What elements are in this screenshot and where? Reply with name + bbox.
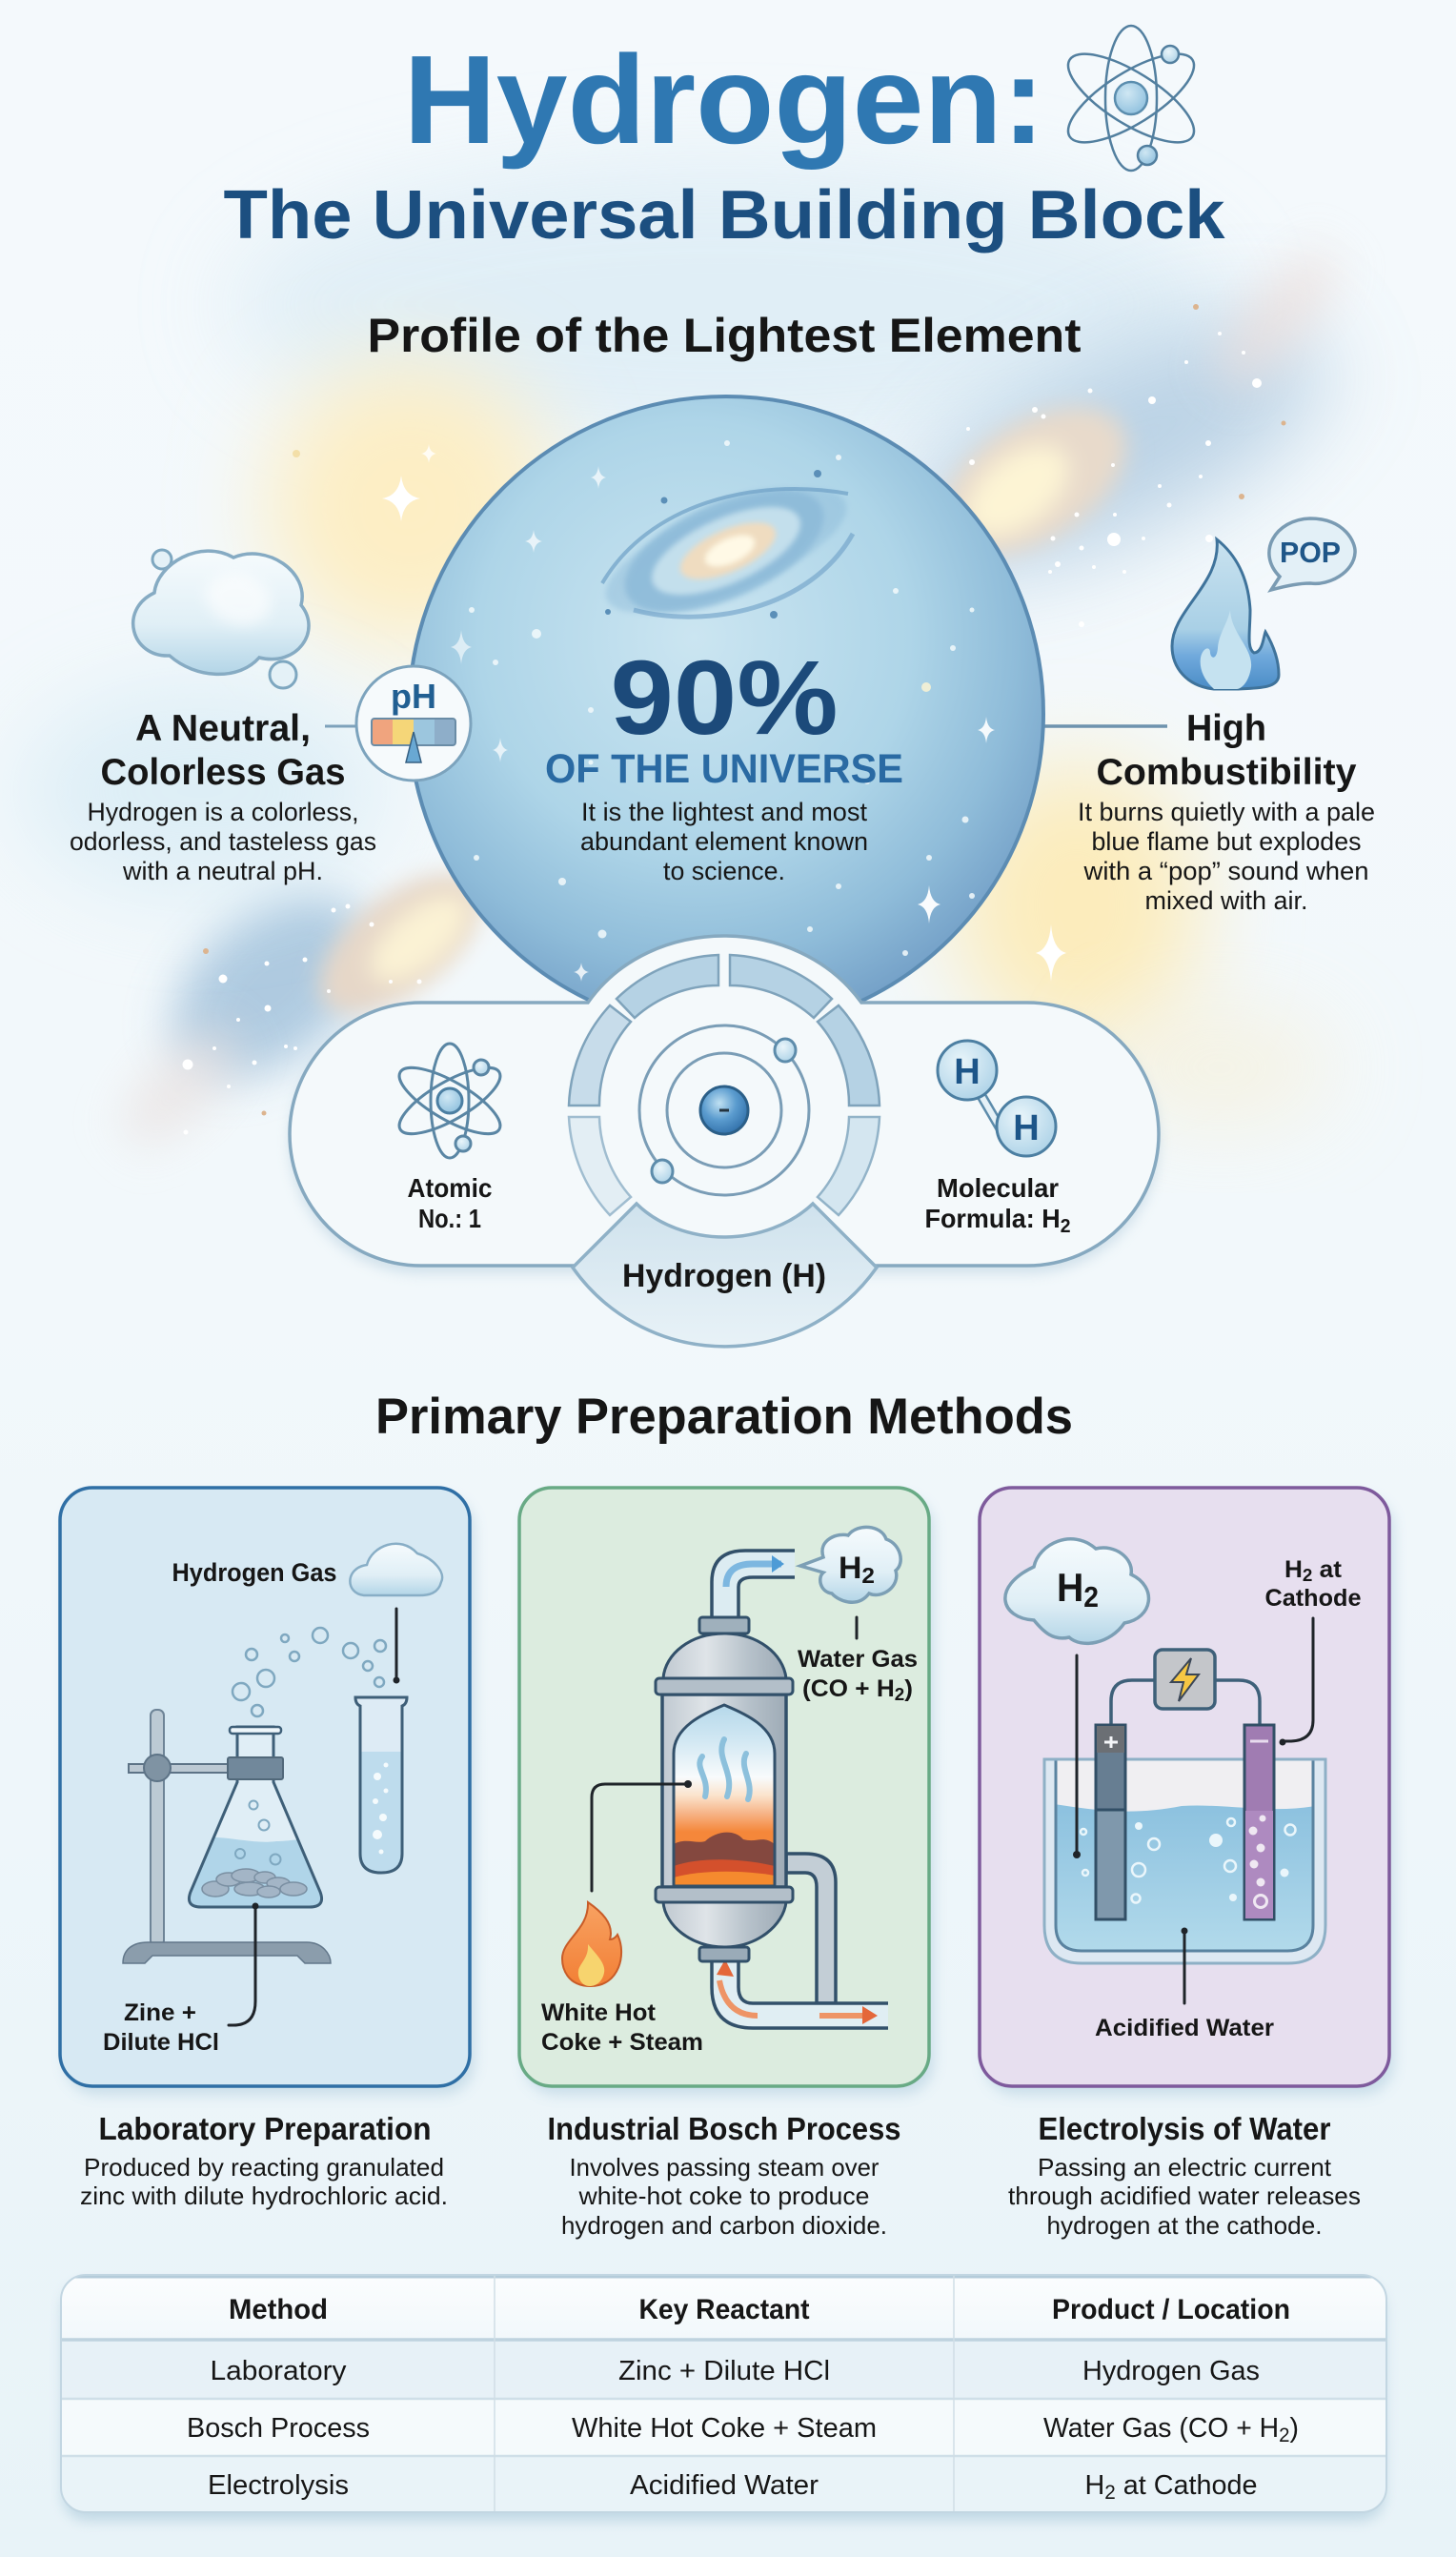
icon: pH scale <box>356 666 471 781</box>
title <box>223 30 1226 254</box>
label: H2 at cathode: 2 <box>1303 1566 1312 1585</box>
pointer line <box>229 1902 259 2025</box>
text: neutral colorless gas: with a neutral pH. <box>122 857 323 885</box>
short connector <box>856 1617 858 1638</box>
caption: industrial bosch process: hydrogen and carbon dioxide. <box>561 2211 887 2240</box>
circuit wires <box>1111 1680 1260 1725</box>
row: electrolysis: H <box>1084 2470 1104 2501</box>
heading: profile: Profile of the Lightest Element <box>368 309 1082 362</box>
text: neutral colorless gas: A Neutral, <box>135 708 311 749</box>
label: white hot coke: Coke + Steam <box>541 2029 703 2056</box>
sphere description <box>580 798 868 885</box>
label: H2 at cathode: Cathode <box>1265 1585 1362 1612</box>
table header: Key Reactant <box>638 2294 810 2325</box>
text: high combustibility: High <box>1186 708 1266 749</box>
beaker <box>1044 1759 1325 1963</box>
text: neutral colorless gas <box>70 708 376 885</box>
outlet cloud <box>800 1527 900 1602</box>
icon: orange flame <box>562 1902 621 1986</box>
text: high combustibility: with a “pop” sound when <box>1082 857 1368 885</box>
caption: laboratory preparation: zinc with dilute hydrochloric acid. <box>80 2182 448 2210</box>
pointer line <box>592 1780 692 1891</box>
text: high combustibility: mixed with air. <box>1145 886 1307 915</box>
text: atomic number: No.: 1 <box>418 1204 481 1233</box>
comparison table <box>61 2275 1386 2521</box>
panel: atom profile pill <box>290 936 1159 1347</box>
text: high combustibility <box>1078 708 1375 915</box>
top outlet pipe <box>712 1551 795 1617</box>
label: white hot coke <box>541 1999 703 2056</box>
row: electrolysis: 2 <box>1104 2482 1116 2504</box>
icon: POP speech bubble: POP <box>1280 536 1341 569</box>
row: bosch process: Water Gas (CO + H <box>1043 2413 1284 2444</box>
row: electrolysis: at Cathode <box>1116 2470 1258 2501</box>
hydrogen atom diagram <box>639 1025 809 1195</box>
panel: laboratory preparation <box>60 1488 475 2095</box>
caption: industrial bosch process <box>547 2111 901 2240</box>
label: zinc and acid: Zine + <box>124 1999 196 2026</box>
panel: right connector line <box>1039 724 1167 728</box>
text: neutral colorless gas: odorless, and tasteless gas <box>70 827 376 856</box>
icon: POP speech bubble <box>1269 518 1355 590</box>
stat label: OF THE UNIVERSE <box>545 746 903 792</box>
caption: industrial bosch process: Industrial Bosch Process <box>547 2111 901 2146</box>
caption: electrolysis of water <box>1008 2111 1361 2240</box>
test tube <box>355 1697 407 1873</box>
icon: H2 molecule: H <box>1013 1108 1040 1148</box>
panel: industrial bosch process <box>519 1488 934 2095</box>
gas cloud <box>1005 1539 1148 1643</box>
icon: cloud <box>133 550 309 688</box>
row: bosch process: ) <box>1290 2413 1299 2444</box>
stat: 90%: 90% <box>610 639 839 757</box>
row: bosch process: 2 <box>1279 2425 1290 2446</box>
label: H2 in cloud: H <box>839 1551 860 1585</box>
label: H2 at cathode: H <box>1284 1556 1302 1583</box>
element name badge: Hydrogen (H) <box>622 1258 826 1294</box>
caption: laboratory preparation: Produced by reacting granulated <box>84 2153 444 2182</box>
label: hydrogen gas: Hydrogen Gas <box>172 1558 337 1587</box>
panel: left connector line <box>325 724 358 728</box>
text: molecular formula: Formula: H <box>924 1204 1065 1233</box>
retort stand <box>123 1710 331 1963</box>
row: laboratory: Hydrogen Gas <box>1082 2356 1260 2386</box>
icon: H2 molecule: H <box>954 1052 981 1092</box>
pointer: acidified water <box>1182 1927 1187 2003</box>
row: electrolysis: Acidified Water <box>630 2470 819 2501</box>
table header: Method <box>229 2294 328 2325</box>
caption: laboratory preparation <box>80 2111 448 2210</box>
label: H2 at cathode: at <box>1312 1556 1343 1583</box>
row: laboratory: Laboratory <box>210 2356 347 2386</box>
icon: gas cloud <box>350 1544 442 1595</box>
sphere: 90% of the universe <box>409 396 1043 1031</box>
row: electrolysis: Electrolysis <box>208 2470 349 2501</box>
label: water gas: ) <box>904 1675 913 1702</box>
text: high combustibility: It burns quietly with a pale <box>1078 798 1375 826</box>
pointer: cloud to water <box>1073 1655 1081 1858</box>
galaxy in sphere <box>591 464 861 638</box>
row: bosch process: Bosch Process <box>187 2413 370 2444</box>
sphere description: to science. <box>663 857 785 885</box>
sphere description: abundant element known <box>580 827 868 856</box>
reactor vessel <box>656 1617 793 1961</box>
label: zinc and acid <box>103 1999 219 2056</box>
bubbles <box>233 1628 386 1716</box>
text: high combustibility: blue flame but explodes <box>1092 827 1361 856</box>
icon: title atom <box>1056 26 1206 171</box>
icon: atom <box>391 1044 509 1158</box>
label: H2: 2 <box>1083 1582 1099 1613</box>
side pipe <box>786 1854 836 2003</box>
row: laboratory <box>210 2356 1260 2386</box>
row: bosch process <box>187 2413 1299 2446</box>
table header <box>229 2294 1290 2325</box>
heading: primary preparation methods: Primary Preparation Methods <box>375 1389 1073 1445</box>
caption: industrial bosch process: Involves passing steam over <box>570 2153 880 2182</box>
caption: industrial bosch process: white-hot coke to produce <box>577 2182 869 2210</box>
label: water gas: (CO + H <box>802 1675 890 1702</box>
label: white hot coke: White Hot <box>541 1999 657 2026</box>
pointer: cathode label <box>1279 1618 1313 1746</box>
caption: electrolysis of water: through acidified water releases <box>1008 2182 1361 2210</box>
icon: pH scale: pH <box>391 677 436 716</box>
caption: laboratory preparation: Laboratory Preparation <box>99 2111 431 2146</box>
panel: electrolysis of water <box>980 1488 1394 2095</box>
bottom inlet pipe <box>712 1959 888 2028</box>
power source <box>1155 1650 1215 1709</box>
text: molecular formula <box>924 1173 1071 1237</box>
sphere description: It is the lightest and most <box>581 798 867 826</box>
caption: electrolysis of water: hydrogen at the cathode. <box>1046 2211 1323 2240</box>
conical flask <box>187 1725 324 1908</box>
element name badge <box>573 1204 877 1347</box>
label: water gas: 2 <box>895 1685 904 1704</box>
text: high combustibility: Combustibility <box>1096 752 1357 793</box>
anode <box>1096 1725 1125 1919</box>
ring segments <box>569 955 880 1215</box>
title: Hydrogen: <box>404 30 1044 170</box>
label: H2 at cathode <box>1265 1556 1362 1612</box>
label: water gas: Water Gas <box>798 1646 918 1673</box>
label: water gas <box>798 1646 918 1704</box>
text: atomic number: Atomic <box>408 1173 492 1203</box>
cathode <box>1244 1725 1274 1919</box>
text: neutral colorless gas: Colorless Gas <box>101 752 345 793</box>
text: atomic number <box>408 1173 492 1233</box>
row: electrolysis <box>208 2470 1258 2504</box>
pointer line <box>393 1609 400 1683</box>
text: molecular formula: Molecular <box>937 1173 1059 1203</box>
table header: Product / Location <box>1052 2294 1290 2325</box>
icon: blue flame <box>1172 539 1279 689</box>
caption: electrolysis of water: Passing an electric current <box>1038 2153 1332 2182</box>
label: acidified water: Acidified Water <box>1095 2015 1274 2041</box>
row: bosch process: White Hot Coke + Steam <box>572 2413 877 2444</box>
text: neutral colorless gas: Hydrogen is a colorless, <box>88 798 358 826</box>
text: molecular formula: 2 <box>1061 1216 1071 1237</box>
label: H2 in cloud: 2 <box>861 1563 875 1588</box>
row: laboratory: Zinc + Dilute HCl <box>618 2356 830 2386</box>
caption: electrolysis of water: Electrolysis of Water <box>1039 2111 1331 2146</box>
label: H2: H <box>1057 1565 1085 1610</box>
label: zinc and acid: Dilute HCl <box>103 2029 219 2056</box>
sphere stars <box>451 440 995 982</box>
title: The Universal Building Block <box>223 177 1226 254</box>
icon: H2 molecule <box>938 1041 1056 1156</box>
